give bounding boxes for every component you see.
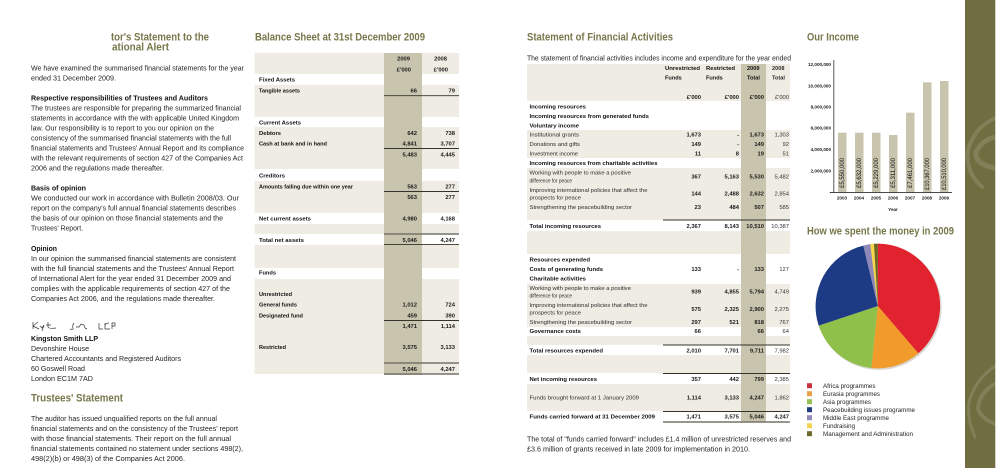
table: balance sheet	[254, 53, 459, 375]
table: financial activities: difference for peace	[530, 178, 572, 184]
table: financial activities: 10,510	[746, 224, 764, 230]
heading: how we spent the money: How we spent the money in 2009	[807, 226, 954, 238]
table: financial activities: Improving international policies that affect the	[530, 303, 648, 309]
bar chart: income by year: £10,367,000	[925, 157, 931, 190]
text block: trustees' statement: The auditor has issued unqualified reports on the full annual	[31, 414, 217, 423]
bar chart: income by year: £5,311,000	[891, 157, 897, 188]
text block: trustees' statement	[30, 414, 243, 463]
table: financial activities: 2,488	[724, 192, 740, 198]
table: financial activities: prospects for peace	[530, 196, 581, 202]
legend: spending categories: Fundraising	[823, 424, 855, 430]
heading: auditor's statement	[111, 32, 209, 54]
table: financial activities: 1,114	[687, 396, 702, 402]
table: balance sheet: 5,046	[402, 238, 418, 244]
table: financial activities: 4,247	[774, 414, 789, 420]
table: financial activities: Total	[747, 76, 760, 82]
text block: opinion: complies with the applicable requirements of section 427 of the	[31, 284, 230, 293]
table: financial activities: Strengthening the peacebuilding sector	[530, 320, 632, 326]
table: financial activities: 818	[754, 320, 765, 326]
table: balance sheet: Net current assets	[259, 216, 311, 222]
table: financial activities: 4,247	[749, 396, 764, 402]
bar chart: income by year: 6,000,000	[811, 126, 831, 131]
table: financial activities: Voluntary income	[530, 124, 579, 130]
table: financial activities: 5,046	[749, 414, 765, 420]
table: financial activities: 19	[758, 152, 765, 158]
text block: basis of opinion: Basis of opinion	[31, 184, 86, 193]
text block: funds carried forward note: £3.6 million of grants received in late 2009 for implementation in 2010.	[527, 445, 750, 454]
table: balance sheet: Creditors	[259, 174, 285, 180]
table: balance sheet: 642	[407, 131, 417, 137]
table: financial activities: Funds	[706, 76, 723, 82]
table: balance sheet: Fixed Assets	[259, 78, 295, 84]
table: balance sheet: 390	[445, 313, 455, 319]
table: financial activities: 5,530	[749, 174, 764, 180]
table: financial activities: £'000	[750, 95, 764, 101]
table: balance sheet: 5,046	[402, 367, 418, 373]
table: financial activities: 3,133	[724, 396, 740, 402]
text block: opinion: Companies Act 2006, and the regulations made thereafter.	[31, 294, 215, 303]
table: financial activities: 23	[695, 205, 702, 211]
table: financial activities: 4,749	[774, 290, 789, 296]
table: balance sheet: Debtors	[259, 131, 281, 137]
table: financial activities: 66	[758, 329, 765, 335]
bar chart: income by year: 8,000,000	[811, 105, 831, 110]
table: financial activities: 1,673	[749, 133, 765, 139]
table: financial activities: Resources expended	[530, 258, 591, 264]
table: balance sheet: 563	[407, 184, 418, 190]
text block: basis of opinion: Trustees' Report.	[31, 224, 83, 233]
text block: trustees' statement: financial statements contained no statement under sections 498(2),	[31, 444, 243, 453]
bar chart: income by year: 2009	[939, 196, 950, 200]
table: balance sheet: 459	[407, 313, 418, 319]
legend: spending categories: Eurasia programmes	[823, 392, 880, 398]
legend: spending categories: Peacebuilding issues programme	[823, 408, 916, 414]
table: balance sheet: 724	[445, 303, 456, 309]
table: balance sheet: 2008	[434, 57, 448, 63]
text block: respective responsibilities: with the relevant requirements of section 427 of the Companies Act	[30, 154, 244, 163]
table: financial activities: 357	[691, 377, 701, 383]
table: balance sheet: 5,483	[402, 152, 418, 158]
table: balance sheet: 4,841	[402, 142, 418, 148]
table: financial activities: 5,794	[749, 290, 765, 296]
legend: spending categories: Asia programmes	[823, 400, 871, 406]
text block: auditor address: 60 Goswell Road	[31, 364, 85, 373]
table: balance sheet: 4,168	[440, 216, 456, 222]
table: financial activities: Funds	[665, 76, 682, 82]
table: balance sheet: 563	[407, 195, 418, 201]
text block: introduction: ended 31 December 2009.	[31, 73, 116, 82]
table: financial activities: 939	[691, 290, 702, 296]
table: balance sheet: 738	[445, 131, 456, 137]
text block: basis of opinion: the basis of our opinion on those financial statements and the	[31, 214, 223, 223]
text block: auditor address: Kingston Smith LLP	[31, 334, 98, 343]
table: financial activities: Investment income	[530, 152, 578, 158]
table: financial activities: Funds carried forward at 31 December 2009	[530, 414, 655, 420]
text block: respective responsibilities: The trustees are responsible for preparing the summarized financial	[31, 104, 241, 113]
text block: auditor address: Chartered Accountants and Registered Auditors	[31, 354, 181, 363]
table: financial activities: 2,385	[774, 377, 789, 383]
heading: trustees' statement: Trustees' Statement	[31, 392, 123, 404]
table: financial activities: 2009	[747, 66, 759, 72]
table: financial activities	[527, 64, 790, 422]
text block: auditor address: Devonshire House	[31, 344, 89, 353]
table: financial activities: 92	[783, 142, 789, 148]
table: financial activities: 2008	[772, 66, 784, 72]
bar chart: income by year: 2006	[888, 196, 899, 200]
text block: trustees' statement: financial statements and on the consistency of the Trustees' report	[31, 424, 239, 433]
table: financial activities: 507	[754, 205, 764, 211]
table: financial activities: prospects for peace	[530, 310, 581, 316]
table: financial activities: Improving international policies that affect the	[530, 188, 648, 194]
table: balance sheet: 4,980	[402, 216, 417, 222]
text block: auditor address: London EC1M 7AD	[31, 374, 93, 383]
table: financial activities: Unrestricted	[665, 66, 701, 72]
table: balance sheet: Total net assets	[259, 238, 304, 244]
table: financial activities: Incoming resources from generated funds	[530, 114, 649, 120]
table: balance sheet: Unrestricted	[259, 292, 293, 298]
table: balance sheet: Current Assets	[259, 120, 301, 126]
table: financial activities: 8	[736, 152, 740, 158]
table: balance sheet: 4,445	[440, 152, 456, 158]
bar chart: income by year: 10,000,000	[808, 84, 831, 89]
table: balance sheet: Cash at bank and in hand	[259, 142, 328, 148]
table: financial activities: 1,303	[774, 133, 789, 139]
panel: olive side strip	[965, 0, 995, 468]
table: financial activities: 9,711	[750, 348, 765, 354]
table: financial activities: Restricted	[706, 66, 736, 72]
table: balance sheet: 4,247	[440, 367, 455, 373]
pie chart: spending in 2009	[816, 244, 942, 370]
text block: funds carried forward note: The total of "funds carried forward" includes £1.4 million of unrestricted reserves and	[527, 435, 791, 444]
table: financial activities: 575	[691, 307, 702, 313]
table: financial activities: 1,862	[774, 396, 789, 402]
bar chart: income by year: 2003	[837, 196, 848, 200]
table: financial activities: 2,900	[749, 307, 764, 313]
bar chart: income by year: £5,632,000	[857, 157, 863, 188]
bar chart: income by year: 2004	[854, 196, 865, 200]
heading: statement of financial activities: Statement of Financial Activities	[527, 32, 673, 44]
table: financial activities: 2,367	[686, 224, 701, 230]
panel: how we spent the money	[807, 226, 954, 438]
table: financial activities: Total incoming resources	[530, 224, 601, 230]
heading: our income: Our Income	[807, 32, 859, 44]
panel: statement of financial activities	[527, 32, 791, 454]
table: financial activities: 64	[783, 329, 790, 335]
text block: respective responsibilities: consistency of the summarised financial statements with the full	[31, 134, 231, 143]
table: financial activities: Total	[772, 76, 785, 82]
text block: respective responsibilities: 2006 and the regulations made thereafter.	[31, 164, 164, 173]
table: financial activities: 767	[779, 320, 789, 326]
bar chart: income by year: £7,461,000	[908, 157, 914, 188]
icon: auditor signature	[33, 322, 115, 331]
table: balance sheet: £'000	[434, 67, 448, 73]
table: financial activities: Total resources expended	[530, 348, 604, 354]
table: balance sheet: Amounts falling due within one year	[259, 184, 354, 190]
table: balance sheet: General funds	[259, 303, 297, 309]
table: financial activities: Charitable activities	[530, 276, 586, 282]
bar chart: income by year: £10,510,000	[942, 157, 948, 190]
table: balance sheet: 1,012	[402, 303, 417, 309]
table: balance sheet: 3,575	[402, 345, 418, 351]
bar chart: income by year: £5,550,000	[840, 157, 846, 188]
table: financial activities: 2,325	[724, 307, 740, 313]
table: financial activities: Incoming resources from charitable activities	[530, 161, 658, 167]
bar chart: income by year: £5,229,000	[874, 157, 880, 188]
text block: respective responsibilities: financial statements and Trustees' Annual Report and its compliance	[31, 144, 244, 153]
table: financial activities: -	[737, 267, 739, 273]
text block: respective responsibilities: law. Our responsibility is to report to you our opinion on the	[31, 124, 214, 133]
table: financial activities: 484	[729, 205, 740, 211]
table: financial activities: Costs of generating funds	[530, 267, 603, 273]
table: financial activities: 10,387	[771, 224, 789, 230]
bar chart: income by year: 4,000,000	[811, 147, 831, 152]
panel: balance sheet	[254, 32, 459, 375]
table: balance sheet: 3,133	[440, 345, 456, 351]
table: financial activities: Funds brought forward at 1 January 2009	[530, 396, 639, 402]
panel: auditor's statement	[30, 32, 244, 463]
text block: basis of opinion: report on the company's full annual financial statements describes	[31, 204, 236, 213]
table: balance sheet: 1,471	[402, 324, 418, 330]
table: balance sheet: £'000	[397, 67, 411, 73]
table: financial activities: 66	[695, 329, 702, 335]
heading: auditor's statement: tor's Statement to the	[111, 32, 209, 44]
table: financial activities: 521	[729, 320, 740, 326]
table: financial activities: Working with people to make a positive	[530, 170, 631, 176]
text block: trustees' statement: 498(2)(b) or 498(3) of the Companies Act 2006.	[31, 454, 185, 463]
panel: our income	[807, 32, 952, 212]
table: balance sheet: Tangible assets	[259, 88, 300, 94]
text block: basis of opinion	[31, 184, 239, 233]
bar chart: income by year	[808, 60, 952, 212]
table: financial activities: 2,010	[686, 348, 701, 354]
table: financial activities: £'000	[775, 95, 789, 101]
table: financial activities: -	[737, 142, 739, 148]
table: financial activities: 51	[783, 152, 789, 158]
table: financial activities: 2,854	[774, 192, 790, 198]
table: financial activities: Donations and gifts	[530, 142, 580, 148]
text block: trustees' statement: with those financial statements. Their report on the full annual	[30, 434, 231, 443]
table: financial activities: 2,275	[774, 307, 789, 313]
table: balance sheet: Funds	[259, 271, 276, 277]
table: financial activities: Institutional grants	[530, 133, 579, 139]
table: financial activities: 367	[691, 174, 701, 180]
text block: respective responsibilities	[30, 94, 244, 173]
heading: auditor's statement: ational Alert	[112, 42, 169, 54]
table: financial activities: 133	[754, 267, 765, 273]
table: balance sheet: Restricted	[259, 345, 287, 351]
table: balance sheet: 3,707	[440, 142, 455, 148]
table: financial activities: £'000	[725, 95, 739, 101]
bar chart: income by year: 2,000,000	[811, 169, 831, 174]
bar chart: income by year: 2008	[922, 196, 933, 200]
table: financial activities: -	[737, 133, 739, 139]
table: balance sheet: 66	[411, 88, 418, 94]
text block: auditor address	[31, 334, 181, 383]
bar chart: income by year: 2007	[905, 196, 916, 200]
table: financial activities: 11	[695, 152, 702, 158]
table: financial activities: 133	[691, 267, 702, 273]
bar chart: income by year: -	[829, 190, 831, 195]
legend: spending categories: Management and Administration	[823, 432, 913, 438]
legend: spending categories: Africa programmes	[823, 384, 876, 390]
table: financial activities: Working with people to make a positive	[530, 286, 631, 292]
text block: basis of opinion: We conducted our work in accordance with Bulletin 2008/03. Our	[31, 194, 239, 203]
table: balance sheet: Designated fund	[259, 313, 304, 319]
table: financial activities: 144	[691, 192, 702, 198]
table: financial activities: Net incoming resources	[530, 377, 597, 383]
text block: opinion: of International Alert for the year ended 31 December 2009 and	[31, 274, 231, 283]
text block: opinion: with the full financial statements and the Trustees' Annual Report	[30, 264, 235, 273]
table: balance sheet: 2009	[397, 57, 411, 63]
table: financial activities: £'000	[687, 95, 701, 101]
text block: funds carried forward note	[527, 435, 791, 454]
table: financial activities: 5,163	[724, 174, 740, 180]
table: financial activities: Incoming resources	[530, 105, 586, 111]
table: balance sheet: 277	[445, 195, 455, 201]
table: financial activities: 799	[754, 377, 765, 383]
table: balance sheet: 79	[449, 88, 456, 94]
table: financial activities: 149	[754, 142, 765, 148]
text block: respective responsibilities: statements in accordance with the with applicable United Kingdom	[31, 114, 239, 123]
text block: introduction	[31, 64, 244, 82]
table: balance sheet: 4,247	[440, 238, 455, 244]
text block: opinion: In our opinion the summarised financial statements are consistent	[31, 254, 237, 263]
table: financial activities: 1,471	[686, 414, 702, 420]
table: financial activities: 3,575	[724, 414, 740, 420]
table: balance sheet: 1,114	[441, 324, 456, 330]
text block: opinion	[30, 244, 237, 303]
legend: spending categories: Middle East programme	[823, 416, 890, 422]
table: financial activities: 8,143	[724, 224, 740, 230]
bar chart: income by year: 12,000,000	[808, 62, 831, 67]
text block: introduction: We have examined the summarised financial statements for the year	[31, 64, 244, 73]
table: financial activities: 1,673	[686, 133, 702, 139]
heading: balance sheet: Balance Sheet at 31st December 2009	[255, 32, 425, 44]
table: balance sheet: 277	[445, 184, 455, 190]
table: financial activities: 442	[729, 377, 739, 383]
bar chart: income by year: Year	[888, 207, 898, 212]
table: financial activities: 7,982	[774, 348, 789, 354]
table: financial activities: 585	[779, 205, 789, 211]
table: financial activities: difference for peace	[530, 294, 572, 300]
bar chart: income by year: 2005	[871, 196, 882, 200]
text block: respective responsibilities: Respective responsibilities of Trustees and Auditors	[31, 94, 208, 103]
table: financial activities: 4,855	[724, 290, 740, 296]
text block: opinion: Opinion	[31, 244, 57, 253]
table: financial activities: Governance costs	[530, 329, 581, 335]
text block: statement introduction: The statement of financial activities includes income and expenditure for the year ended	[527, 54, 791, 63]
table: financial activities: 149	[691, 142, 702, 148]
legend: spending categories	[807, 383, 916, 438]
table: financial activities: Strengthening the peacebuilding sector	[530, 205, 632, 211]
table: financial activities: 7,701	[724, 348, 740, 354]
table: financial activities: 297	[691, 320, 701, 326]
table: financial activities: 5,482	[774, 174, 789, 180]
table: financial activities: 2,632	[749, 192, 764, 198]
table: financial activities: 127	[779, 267, 789, 273]
